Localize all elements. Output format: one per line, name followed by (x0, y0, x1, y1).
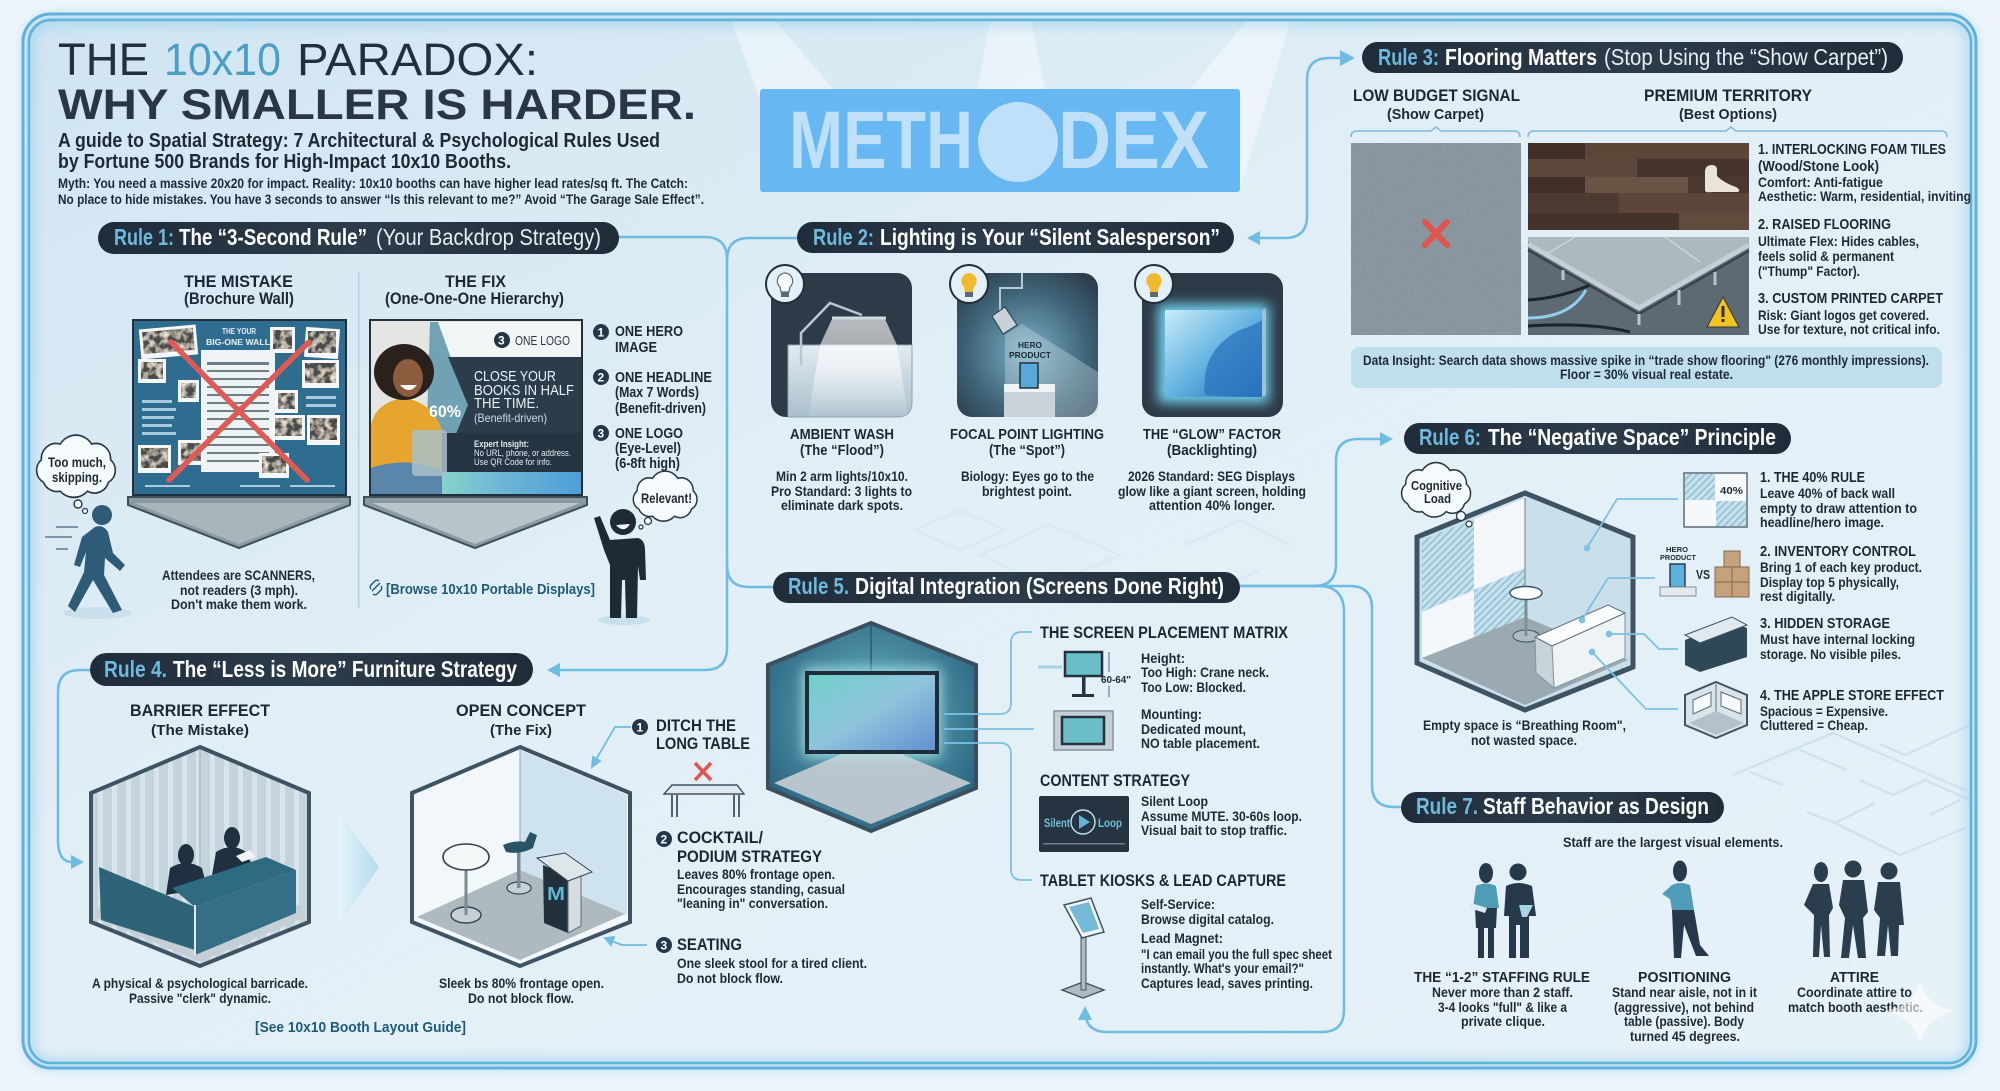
caption: breathing room: not wasted space. (1471, 732, 1577, 748)
icon: storage cabinet (1685, 617, 1747, 672)
thought bubble: cognitive load (1402, 463, 1472, 527)
text: positioning: (aggressive), not behind (1614, 999, 1754, 1015)
icon: warning (1707, 297, 1739, 327)
section: screen placement matrix: Mounting: (1141, 706, 1202, 722)
heading: premium territory: PREMIUM TERRITORY (1644, 87, 1812, 105)
section: screen placement matrix: Dedicated mount, (1141, 721, 1246, 737)
cocktail table (443, 844, 489, 923)
illustration: brochure wall backdrop: BIG-ONE WALL (206, 338, 270, 347)
text: the 40 percent rule: 1. THE 40% RULE (1760, 469, 1865, 486)
leader arrows (592, 727, 647, 945)
heading: rule 4: Rule 4. (104, 656, 167, 682)
intro myth text: No place to hide mistakes. You have 3 seconds to answer “Is this relevant to me?” Avoid “The Garage Sale Effect”. (58, 192, 704, 207)
title: 10x10 (164, 34, 281, 85)
caption: barrier: Passive "clerk" dynamic. (129, 990, 271, 1006)
heading: rule 3: Rule 3: (1378, 44, 1439, 70)
heading: rule 3 (1362, 42, 1903, 73)
text: inventory control (1760, 543, 1922, 604)
list: one-one-one: 3 (598, 426, 604, 440)
illustration: barrier booth (91, 747, 309, 966)
icon: hero product versus boxes: HERO (1666, 547, 1689, 554)
text: attire: match booth aesthetic. (1788, 999, 1923, 1015)
caption: open concept: Do not block flow. (468, 990, 574, 1006)
section: tablet kiosks: Self-Service: (1141, 896, 1215, 912)
list: one-one-one: 2 (598, 370, 604, 384)
heading: the mistake (184, 273, 294, 308)
title (58, 34, 696, 129)
stool (503, 832, 537, 894)
text: attire: Coordinate attire to (1797, 984, 1912, 1000)
illustration: hero backdrop fix: ONE LOGO (515, 334, 570, 348)
illustration: hero backdrop fix: 3 (498, 334, 505, 348)
text: inventory control: 2. INVENTORY CONTROL (1760, 543, 1916, 560)
heading: low budget signal: (Show Carpet) (1387, 106, 1484, 123)
section: screen placement matrix: Too High: Crane neck. (1141, 664, 1269, 680)
thought bubble: too much: Too much, (48, 454, 106, 470)
heading: low budget signal (1353, 87, 1520, 123)
illustration: booth with negative space (1417, 493, 1633, 710)
list: one-one-one (593, 323, 712, 472)
storage counter (1535, 605, 1625, 688)
list: seating: 3 (660, 938, 668, 952)
text: focal point: (The “Spot”) (989, 442, 1065, 459)
text: apple store effect: Cluttered = Cheap. (1760, 717, 1868, 733)
logo: Methodex: METH (789, 95, 973, 186)
heading: rule 7: Staff Behavior as Design (1483, 793, 1709, 819)
icon: silent loop video (1039, 796, 1129, 852)
text: flooring options: ("Thump" Factor). (1758, 263, 1860, 279)
list: one-one-one: 1 (598, 326, 604, 340)
list: cocktail podium strategy: Encourages standing, casual (677, 881, 845, 897)
heading: the mistake: THE MISTAKE (184, 273, 293, 291)
text: flooring options: Use for texture, not critical info. (1758, 321, 1940, 337)
text: hidden storage: Must have internal locking (1760, 631, 1915, 647)
subtitle: A guide to Spatial Strategy: 7 Architectural & Psychological Rules Used (58, 130, 660, 152)
text: flooring options: Aesthetic: Warm, residential, inviting (1758, 188, 1971, 204)
caption: breathing room (1423, 717, 1626, 748)
subtitle: by Fortune 500 Brands for High-Impact 10x10 Booths. (58, 151, 511, 173)
section: tablet kiosks: "I can email you the full spec sheet (1141, 946, 1332, 962)
icon: monitor on stand: 60-64" (1101, 674, 1131, 686)
icon: hero product versus boxes (1660, 547, 1749, 597)
heading: rule 4: The “Less is More” Furniture Strategy (173, 656, 517, 682)
people seated (166, 827, 252, 895)
logo: Methodex: O (992, 95, 1044, 186)
heading: rule 2: Lighting is Your “Silent Salesperson” (880, 224, 1220, 250)
heading: the fix (385, 273, 564, 308)
section: tablet kiosks: TABLET KIOSKS & LEAD CAPTURE (1040, 872, 1286, 890)
thought bubble: relevant (633, 471, 697, 529)
card: focal point lighting: PRODUCT (1009, 350, 1052, 360)
text: ambient wash: Pro Standard: 3 lights to (771, 483, 912, 499)
list: seating: SEATING (677, 936, 742, 954)
decorative sparkle (1885, 980, 1955, 1045)
heading: rule 1: (Your Backdrop Strategy) (376, 224, 601, 250)
card: focal point lighting (957, 273, 1098, 417)
section: content strategy: Visual bait to stop traffic. (1141, 822, 1287, 838)
heading: rule 1: The “3-Second Rule” (179, 224, 367, 250)
text: staffing rule: 3-4 looks "full" & like a (1438, 999, 1567, 1015)
text: apple store effect: Spacious = Expensive. (1760, 703, 1888, 719)
section: content strategy (1039, 772, 1302, 852)
caption: scanners (162, 567, 315, 612)
podium (537, 853, 592, 933)
text: the 40 percent rule: headline/hero image. (1760, 514, 1884, 530)
caption: barrier: A physical & psychological barricade. (92, 975, 308, 991)
heading: rule 2 (797, 222, 1234, 253)
list: ditch the long table: 1 (636, 720, 644, 734)
caption: scanners: Attendees are SCANNERS, (162, 567, 315, 583)
icon: bulb bright (1135, 265, 1173, 303)
icon: positioning figure (1662, 860, 1709, 958)
text: positioning: table (passive). Body (1624, 1013, 1744, 1029)
text: focal point: brightest point. (982, 483, 1072, 499)
text: flooring options: Ultimate Flex: Hides cables, (1758, 233, 1919, 249)
illustration: brochure wall backdrop: THE YOUR (222, 327, 256, 336)
heading: rule 2: Rule 2: (813, 224, 874, 250)
title: THE (58, 34, 149, 85)
text: flooring options: Risk: Giant logos get covered. (1758, 307, 1929, 323)
illustration: open booth (412, 747, 630, 966)
image: show carpet (1351, 143, 1521, 335)
section: tablet kiosks: Captures lead, saves printing. (1141, 975, 1313, 991)
text: positioning: Stand near aisle, not in it (1612, 984, 1757, 1000)
heading: rule 6: Rule 6: (1419, 424, 1481, 450)
text: attire: ATTIRE (1830, 969, 1879, 986)
panel: rule 5 (768, 572, 1332, 998)
text: the 40 percent rule: empty to draw attention to (1760, 500, 1917, 516)
illustration: screen booth (768, 623, 976, 831)
heading: rule 6: The “Negative Space” Principle (1488, 424, 1776, 450)
list: cocktail podium strategy: "leaning in" conversation. (677, 895, 828, 911)
text: staffing rule (1414, 969, 1590, 1029)
heading: rule 1: Rule 1: (114, 224, 174, 250)
text: inventory control: Display top 5 physically, (1760, 574, 1899, 590)
text: flooring options: feels solid & permanent (1758, 248, 1894, 264)
icon: engaged attendee (594, 509, 650, 625)
thought bubble: too much: skipping. (52, 469, 102, 485)
icon: 40 percent square: 40% (1720, 485, 1744, 497)
heading: open concept: (The Fix) (490, 722, 552, 739)
section: screen placement matrix: Too Low: Blocked. (1141, 679, 1246, 695)
text: inventory control: Bring 1 of each key product. (1760, 559, 1922, 575)
icon: monitor on stand (1038, 652, 1131, 697)
list: cocktail podium strategy: 2 (660, 832, 668, 846)
section: screen placement matrix (1038, 624, 1288, 751)
icon: hero product versus boxes: PRODUCT (1660, 555, 1697, 562)
panel: rule 2 (766, 222, 1306, 513)
heading: barrier effect: (The Mistake) (151, 722, 249, 739)
icon: 40 percent square (1684, 473, 1747, 527)
text: positioning: turned 45 degrees. (1630, 1028, 1740, 1044)
list: one-one-one: (6-8ft high) (615, 455, 680, 472)
subheading: staff: Staff are the largest visual elements. (1563, 834, 1783, 850)
stool table (1510, 586, 1542, 642)
text: flooring options: 2. RAISED FLOORING (1758, 216, 1891, 233)
text: ambient wash: AMBIENT WASH (790, 426, 894, 443)
illustration: hero backdrop fix: 60% (429, 402, 461, 421)
text: focal point (950, 426, 1104, 499)
logo: Methodex: DEX (1058, 95, 1209, 186)
section: tablet kiosks (1040, 872, 1332, 998)
leader lines (944, 632, 1034, 880)
list: seating (656, 936, 867, 986)
title: WHY SMALLER IS HARDER. (58, 81, 696, 129)
card: ambient wash (771, 273, 912, 417)
caption: open concept (439, 975, 604, 1006)
logo: Methodex (760, 89, 1240, 192)
text: positioning: POSITIONING (1638, 969, 1731, 986)
illustration: hero backdrop fix: BOOKS IN HALF (474, 383, 574, 399)
text: staffing rule: Never more than 2 staff. (1432, 984, 1573, 1000)
heading: rule 4 (90, 653, 533, 686)
thought bubble: too much (37, 435, 115, 514)
list: ditch the long table (632, 717, 750, 817)
heading: rule 6 (1404, 423, 1791, 454)
list: one-one-one: (Max 7 Words) (615, 384, 699, 401)
illustration: hero backdrop fix: CLOSE YOUR (474, 369, 556, 385)
list: cocktail podium strategy (656, 829, 845, 911)
caption: barrier (92, 975, 308, 1006)
panel: rule 3 (1351, 42, 1971, 388)
section: content strategy: CONTENT STRATEGY (1040, 772, 1190, 790)
image: wood flooring (1528, 143, 1749, 230)
list: one-one-one: (Eye-Level) (615, 440, 681, 457)
intro myth text (58, 176, 704, 207)
list: cocktail podium strategy: PODIUM STRATEGY (677, 848, 822, 866)
list: cocktail podium strategy: Leaves 80% frontage open. (677, 866, 835, 882)
section: tablet kiosks: Browse digital catalog. (1141, 911, 1274, 927)
section: content strategy: Silent Loop (1141, 793, 1208, 809)
list: cocktail podium strategy: COCKTAIL/ (677, 829, 763, 847)
text: hidden storage: storage. No visible piles. (1760, 646, 1901, 662)
thought bubble: cognitive load: Load (1424, 491, 1451, 506)
text: positioning (1612, 969, 1757, 1044)
heading: barrier effect (130, 702, 270, 739)
list: one-one-one: ONE LOGO (615, 425, 683, 442)
heading: open concept: OPEN CONCEPT (456, 702, 586, 720)
title: PARADOX: (297, 34, 538, 85)
section: tablet kiosks: instantly. What's your email?" (1141, 960, 1304, 976)
heading: rule 1 (98, 222, 619, 254)
podium: M (547, 884, 565, 904)
callout: data insight (1351, 347, 1942, 388)
heading: rule 5 (773, 572, 1240, 603)
text: ambient wash: Min 2 arm lights/10x10. (776, 468, 908, 484)
icon: hero product versus boxes: VS (1696, 567, 1710, 582)
text: staffing rule: private clique. (1461, 1013, 1545, 1029)
text: inventory control: rest digitally. (1760, 588, 1835, 604)
icon: walking attendee (45, 505, 131, 619)
heading: rule 3: (Stop Using the “Show Carpet”) (1604, 44, 1888, 70)
caption: breathing room: Empty space is “Breathing Room", (1423, 717, 1626, 733)
list: seating: Do not block flow. (677, 970, 783, 986)
thought bubble: relevant: Relevant! (641, 490, 692, 506)
section: screen placement matrix: NO table placement. (1141, 735, 1260, 751)
icon: bulb off (766, 265, 804, 303)
heading: the mistake: (Brochure Wall) (184, 290, 294, 308)
illustration: hero backdrop fix (364, 320, 587, 548)
list: seating: One sleek stool for a tired client. (677, 955, 867, 971)
panel: rule 7 (1401, 792, 1955, 1045)
text: the 40 percent rule: Leave 40% of back wall (1760, 485, 1895, 501)
subtitle (58, 130, 660, 173)
heading: rule 3: Flooring Matters (1445, 44, 1597, 70)
heading: the fix: (One-One-One Hierarchy) (385, 290, 564, 308)
section: screen placement matrix: Height: (1141, 650, 1185, 666)
text: glow factor: glow like a giant screen, holding (1118, 483, 1306, 499)
heading: barrier effect: BARRIER EFFECT (130, 702, 270, 720)
text: flooring options: (Wood/Stone Look) (1758, 158, 1879, 175)
link: browse displays: [Browse 10x10 Portable Displays] (386, 581, 595, 598)
heading: premium territory (1644, 87, 1812, 123)
list: one-one-one: ONE HERO (615, 323, 683, 340)
text: apple store effect (1760, 687, 1944, 733)
heading: rule 7: Rule 7. (1416, 793, 1478, 819)
link: layout guide: [See 10x10 Booth Layout Guide] (255, 1019, 466, 1036)
illustration: hero backdrop fix: Expert Insight: (474, 439, 529, 450)
list: one-one-one: IMAGE (615, 339, 657, 356)
text: flooring options: 3. CUSTOM PRINTED CARPET (1758, 290, 1943, 307)
illustration: brochure wall backdrop (128, 320, 350, 548)
text: focal point: FOCAL POINT LIGHTING (950, 426, 1104, 443)
caption: scanners: not readers (3 mph). (180, 582, 298, 598)
illustration: hero backdrop fix: (Benefit-driven) (474, 411, 547, 425)
section: content strategy: Assume MUTE. 30-60s loop. (1141, 808, 1302, 824)
illustration: hero backdrop fix: No URL, phone, or address. (474, 448, 571, 459)
icon: kiosk (1062, 898, 1104, 998)
callout: data insight: Floor = 30% visual real estate. (1560, 366, 1733, 382)
list: ditch the long table: DITCH THE (656, 717, 736, 735)
icon: two staff (1469, 863, 1536, 958)
caption: open concept: Sleek bs 80% frontage open. (439, 975, 604, 991)
icon: three staff silhouettes (1804, 860, 1904, 958)
intro myth text: Myth: You need a massive 20x20 for impact. Reality: 10x10 booths can have higher lead rates/sq ft. The Catch: (58, 176, 688, 191)
heading: rule 5: Digital Integration (Screens Done Right) (855, 573, 1224, 599)
text: ambient wash: (The “Flood”) (800, 442, 884, 459)
text: glow factor: THE “GLOW” FACTOR (1143, 426, 1281, 443)
heading: premium territory: (Best Options) (1679, 106, 1777, 123)
text: hidden storage: 3. HIDDEN STORAGE (1760, 615, 1890, 632)
panel: rule 6 (1402, 423, 1944, 748)
text: ambient wash (771, 426, 912, 513)
thought bubble: cognitive load: Cognitive (1411, 478, 1462, 493)
list: one-one-one: (Benefit-driven) (615, 400, 706, 417)
text: hidden storage (1760, 615, 1915, 662)
heading: open concept (456, 702, 586, 739)
image: raised flooring (1528, 237, 1749, 335)
icon: silent loop video: Silent (1044, 818, 1070, 830)
text: staffing rule: THE “1-2” STAFFING RULE (1414, 969, 1590, 986)
section: tablet kiosks: Lead Magnet: (1141, 930, 1223, 946)
illustration: hero backdrop fix: THE TIME. (474, 396, 539, 412)
text: glow factor (1118, 426, 1306, 513)
connector arrows between rules (58, 50, 1401, 1032)
text: flooring options (1758, 141, 1971, 337)
heading: rule 5: Rule 5. (788, 573, 849, 599)
list: one-one-one: ONE HEADLINE (615, 369, 712, 386)
panel: rule 4 (90, 653, 867, 1036)
text: focal point: Biology: Eyes go to the (961, 468, 1094, 484)
list: ditch the long table: LONG TABLE (656, 735, 750, 753)
text: glow factor: attention 40% longer. (1149, 497, 1275, 513)
illustration: hero backdrop fix: Use QR Code for info. (474, 457, 552, 468)
heading: the fix: THE FIX (445, 273, 506, 291)
icon: mini booth (1685, 682, 1747, 738)
section: screen placement matrix: THE SCREEN PLACEMENT MATRIX (1040, 624, 1288, 642)
icon: foot (1705, 165, 1739, 192)
panel: rule 1 (37, 222, 712, 625)
text: glow factor: 2026 Standard: SEG Displays (1128, 468, 1295, 484)
icon: silent loop video: Loop (1098, 818, 1122, 830)
leader lines (1580, 499, 1678, 709)
text: ambient wash: eliminate dark spots. (781, 497, 903, 513)
card: glow factor (1142, 273, 1283, 417)
text: apple store effect: 4. THE APPLE STORE EFFECT (1760, 687, 1944, 704)
photo: smiling woman (371, 344, 447, 494)
card: focal point lighting: HERO (1018, 340, 1042, 350)
text: attire (1788, 969, 1923, 1015)
text: flooring options: Comfort: Anti-fatigue (1758, 174, 1883, 190)
heading: low budget signal: LOW BUDGET SIGNAL (1353, 87, 1520, 105)
arrow: mistake to fix (338, 810, 379, 927)
caption: scanners: Don't make them work. (171, 596, 307, 612)
heading: rule 7 (1401, 792, 1724, 823)
icon: mounted screen (1054, 711, 1113, 750)
icon: bulb on (950, 265, 988, 303)
text: flooring options: 1. INTERLOCKING FOAM TILES (1758, 141, 1946, 158)
text: glow factor: (Backlighting) (1167, 442, 1257, 459)
text: the 40 percent rule (1760, 469, 1917, 530)
